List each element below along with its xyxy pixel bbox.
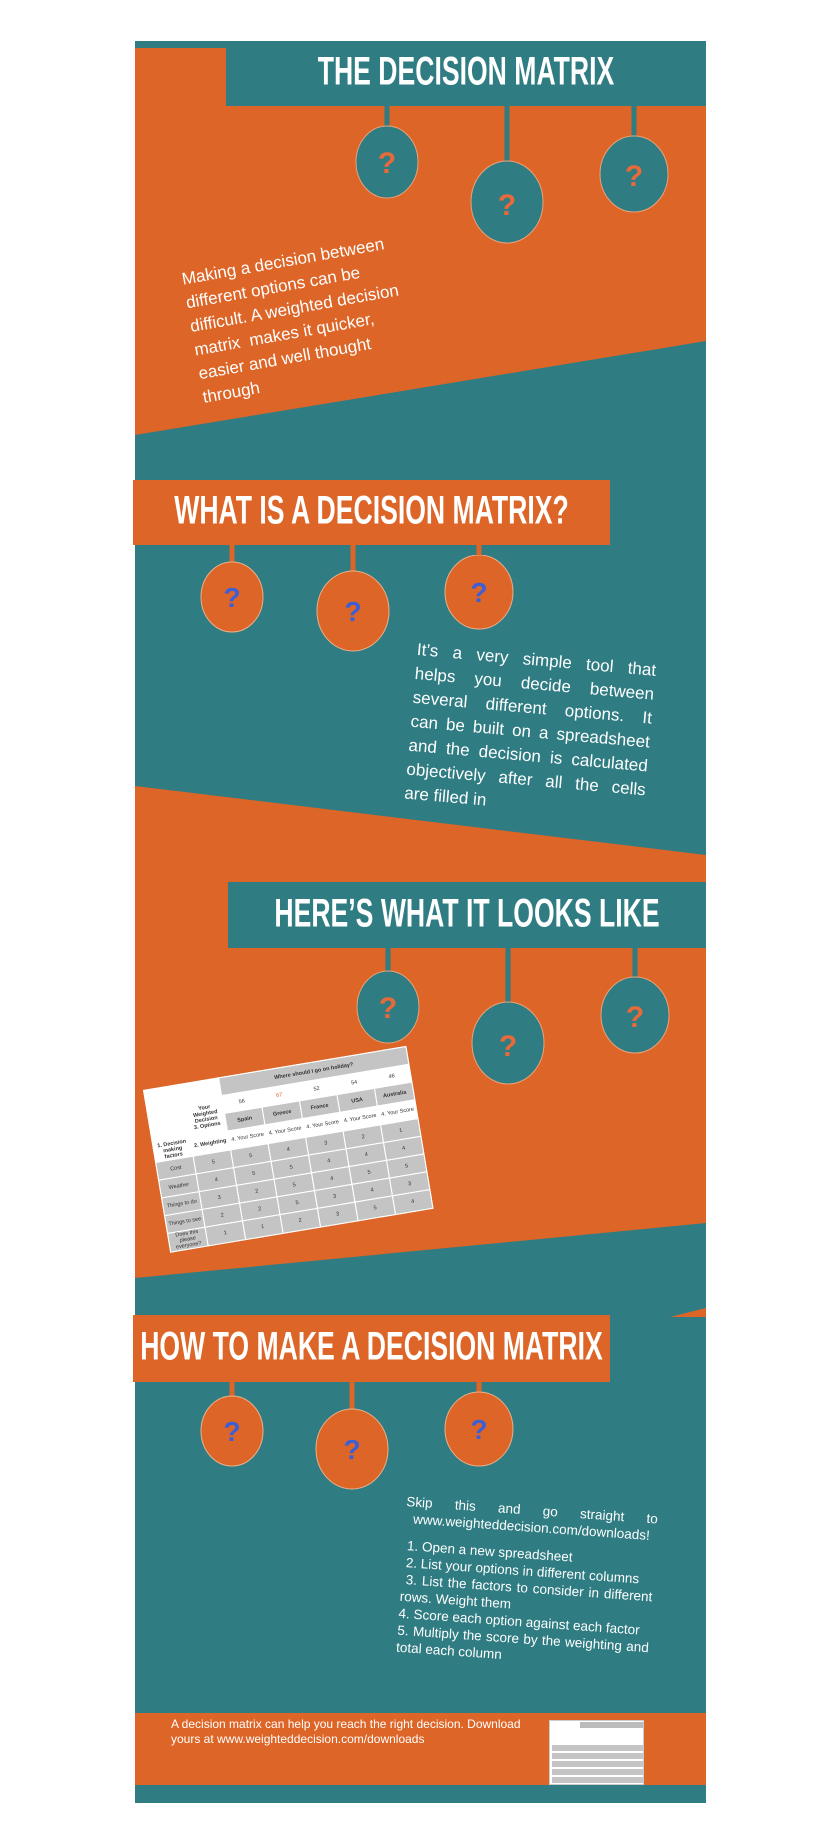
icons: section 1 question circles: ? — [625, 160, 643, 193]
steps text: www.weighteddecision.com/downloads! — [413, 1512, 650, 1543]
chart: decision matrix table: 46 — [388, 1073, 395, 1080]
chart: decision matrix table: 4. Your Score — [343, 1113, 377, 1124]
chart: decision matrix table: 5 — [252, 1170, 256, 1177]
icons: section 2 question circles: ? — [223, 582, 241, 613]
heading: how to make a decision matrix: HOW TO MAKE A DECISION MATRIX — [140, 1324, 603, 1369]
chart: decision matrix table: Cost — [170, 1164, 182, 1172]
chart: decision matrix table: 4 — [364, 1151, 368, 1158]
icons: section 3 question circles: ? — [379, 992, 397, 1025]
chart: decision matrix table: 3 — [333, 1193, 337, 1200]
chart: decision matrix table: 1 — [223, 1230, 227, 1237]
chart: decision matrix table: France — [310, 1102, 329, 1111]
steps text: 5. Multiply the score by the weighting and total each column — [396, 1623, 649, 1662]
icons: section 2 question circles — [200, 555, 514, 652]
definition text: and the decision is calculated — [408, 736, 649, 775]
chart: decision matrix table: Your Weighted Decision — [193, 1104, 218, 1124]
chart: decision matrix table: 3 — [408, 1181, 412, 1187]
footer callout: A decision matrix can help you reach the right decision. Download yours at www.weighteddecision.com/downloads — [171, 1717, 521, 1746]
chart: decision matrix table: 4 — [330, 1175, 334, 1182]
chart: decision matrix table: Does this please everyone? — [175, 1229, 202, 1251]
steps text: 2. List your options in different columns — [405, 1555, 640, 1586]
chart: decision matrix table: Spain — [237, 1115, 253, 1123]
chart: decision matrix table: 5 — [249, 1152, 253, 1159]
chart: decision matrix table: Weather — [168, 1181, 190, 1191]
definition text — [404, 640, 657, 810]
chart: decision matrix table: 3 — [324, 1140, 328, 1146]
icons: section 3 question circles: ? — [626, 1001, 644, 1034]
chart: decision matrix table: 4 — [370, 1187, 374, 1193]
chart: decision matrix table: 67 — [276, 1092, 283, 1099]
icons: section 4 question circles: ? — [470, 1414, 488, 1445]
icons: section 1 question circles — [356, 126, 668, 244]
chart: decision matrix table: 5 — [211, 1159, 215, 1165]
heading: here's what it looks like: HERE’S WHAT IT LOOKS LIKE — [274, 891, 660, 936]
chart: decision matrix table: 2 — [361, 1134, 365, 1140]
chart: decision matrix table: Things to see — [168, 1216, 202, 1227]
title — [226, 41, 706, 106]
chart: decision matrix table: 2. Weighting — [194, 1138, 227, 1149]
icons: section 2 question circles: ? — [470, 577, 488, 608]
chart: decision matrix table: 5 — [367, 1169, 371, 1176]
icons: section 1 question circles: ? — [378, 147, 396, 180]
steps text: Skip this and go straight to — [406, 1494, 658, 1527]
definition text: are filled in — [404, 783, 487, 810]
chart: decision matrix table: 4. Your Score — [381, 1107, 414, 1118]
chart: decision matrix table: 3 — [217, 1194, 221, 1201]
icons: section 4 question circles: ? — [343, 1434, 361, 1465]
chart: decision matrix table: 56 — [238, 1098, 245, 1105]
heading: what is a decision matrix: WHAT IS A DECISION MATRIX? — [174, 488, 569, 533]
chart: decision matrix table: 4. Your Score — [268, 1125, 302, 1137]
chart: decision matrix table: 5 — [292, 1182, 296, 1188]
chart: decision matrix table: 3 — [336, 1211, 340, 1218]
chart: decision matrix table: 5 — [289, 1164, 293, 1170]
chart: decision matrix table: 54 — [351, 1079, 358, 1086]
chart: decision matrix table: 3. Options — [193, 1120, 221, 1131]
title: THE DECISION MATRIX — [318, 49, 614, 94]
chart: decision matrix table: Things to do — [166, 1198, 197, 1209]
icons: section 1 question circles: ? — [498, 189, 516, 222]
chart: decision matrix table: 5 — [405, 1163, 409, 1169]
icons: section 4 question circles: ? — [223, 1416, 241, 1447]
steps text — [396, 1494, 658, 1662]
heading: here's what it looks like — [228, 882, 706, 948]
chart: decision matrix table: 1. Decision making factors — [157, 1139, 187, 1160]
chart: decision matrix table: 4 — [411, 1199, 415, 1205]
steps text: 1. Open a new spreadsheet — [407, 1538, 573, 1565]
chart: decision matrix table: 1 — [399, 1127, 403, 1134]
chart: decision matrix table: 2 — [258, 1206, 262, 1212]
heading: how to make a decision matrix — [133, 1315, 610, 1382]
chart: decision matrix table: USA — [351, 1096, 363, 1104]
definition text: objectively after all the cells — [406, 760, 646, 799]
chart: decision matrix table: 4 — [327, 1158, 331, 1164]
chart: decision matrix table: 5 — [295, 1199, 299, 1206]
chart: decision matrix table: Where should I go on holiday? — [274, 1061, 354, 1081]
chart: decision matrix table: 5 — [373, 1205, 377, 1212]
definition text: can be built on a spreadsheet — [410, 712, 651, 752]
chart: decision matrix table: 2 — [220, 1212, 224, 1218]
definition text: several different options. It — [412, 688, 653, 728]
icons: section 4 question circles — [200, 1392, 514, 1490]
chart: decision matrix table: 4 — [214, 1176, 218, 1183]
chart: decision matrix table: 4 — [402, 1145, 406, 1151]
icons: section 3 question circles — [356, 970, 670, 1084]
chart: decision matrix table: 4. Your Score — [231, 1132, 265, 1143]
icon: table thumbnail — [549, 1720, 644, 1785]
icons: section 2 question circles: ? — [344, 596, 362, 627]
intro text: Making a decision between different options can be difficult. A weighted decision matrix makes it quicker, easier and well thought through — [180, 234, 400, 407]
chart: decision matrix table: 2 — [298, 1218, 302, 1224]
chart: decision matrix table — [143, 1046, 434, 1253]
footer callout — [135, 1713, 706, 1785]
definition text: It’s a very simple tool that — [416, 640, 657, 680]
chart: decision matrix table: 4 — [286, 1146, 290, 1153]
chart: decision matrix table: Australia — [383, 1089, 407, 1099]
chart: decision matrix table: 2 — [255, 1188, 259, 1194]
icons: section 3 question circles: ? — [499, 1030, 517, 1063]
steps text: 3. List the factors to consider in different rows. Weight them — [399, 1572, 653, 1612]
steps text: 4. Score each option against each factor — [398, 1606, 640, 1638]
chart: decision matrix table: Greece — [272, 1108, 292, 1117]
chart: decision matrix table: 52 — [313, 1085, 320, 1092]
chart: decision matrix table: 1 — [261, 1224, 265, 1230]
definition text: helps you decide between — [414, 664, 655, 704]
heading: what is a decision matrix — [133, 480, 610, 545]
chart: decision matrix table: 4. Your Score — [306, 1119, 339, 1131]
